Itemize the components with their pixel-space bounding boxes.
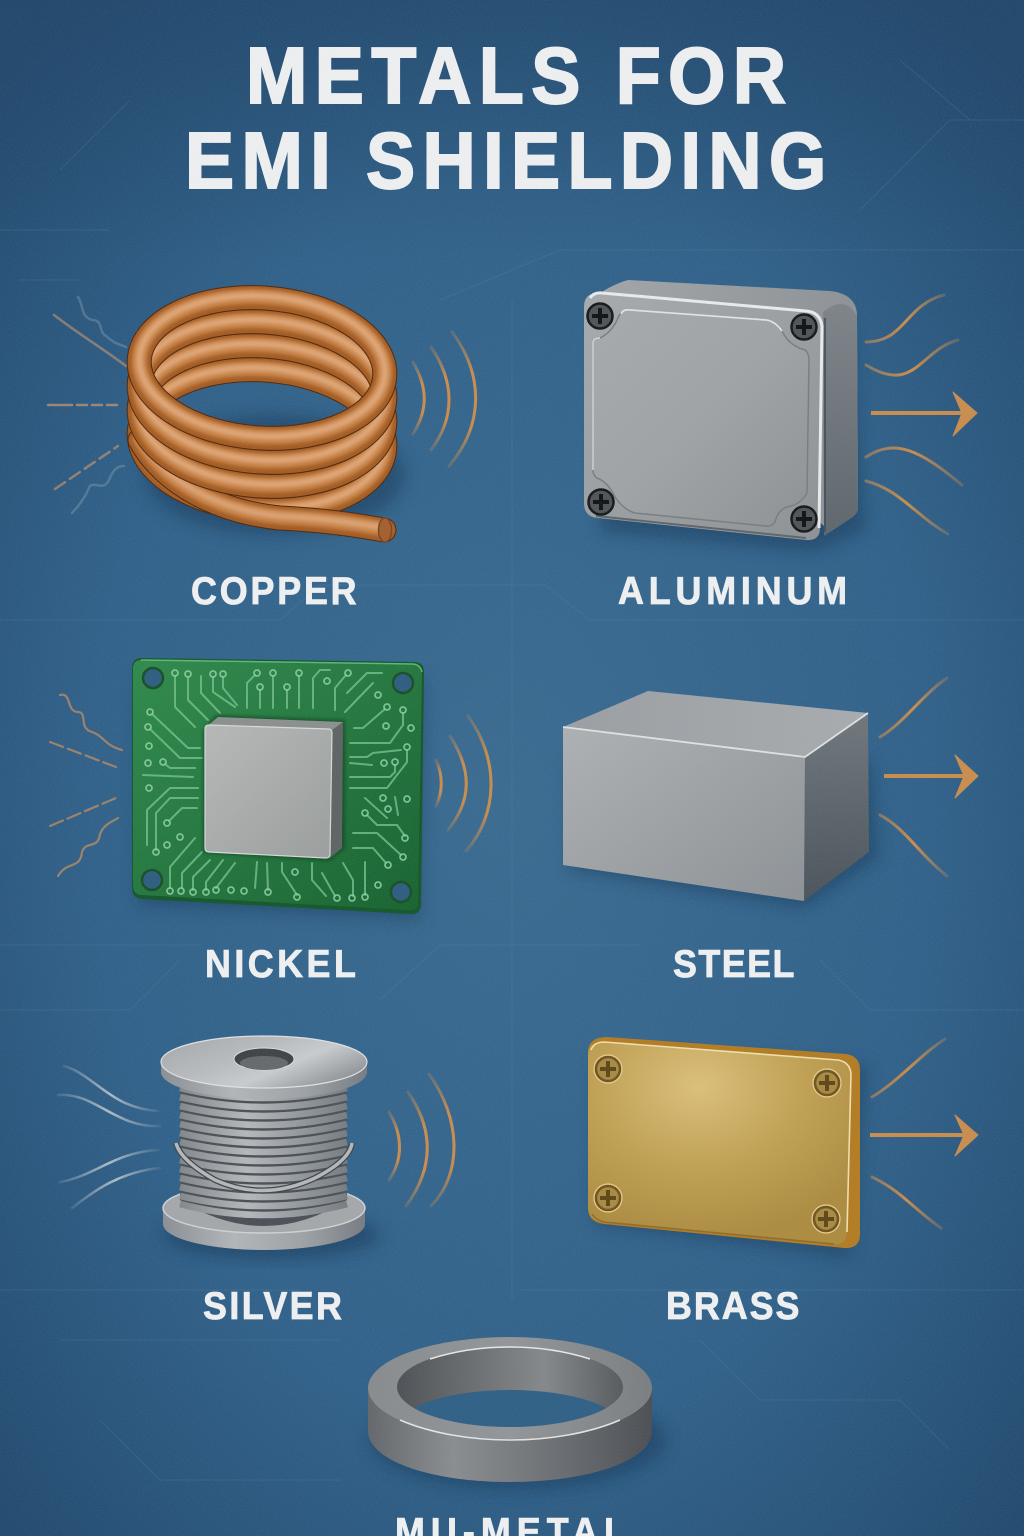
top and side faces	[590, 280, 858, 532]
icon: silver wire spool	[161, 1036, 380, 1259]
tail	[140, 438, 384, 530]
icon: nickel circuit board	[132, 658, 424, 920]
icon: copper coil	[134, 288, 405, 542]
waves: aluminum right	[866, 295, 962, 534]
interference lines: silver left	[58, 1066, 160, 1208]
panel: steel	[563, 678, 978, 985]
traces	[143, 670, 407, 896]
interference lines: copper left	[48, 297, 126, 513]
arrow: steel	[884, 755, 978, 798]
interference lines: nickel left	[50, 695, 122, 876]
top flange	[161, 1062, 367, 1099]
panel: nickel	[50, 658, 491, 985]
screws	[596, 1057, 839, 1231]
panel: brass	[588, 1037, 978, 1327]
panel: copper	[48, 288, 476, 612]
panel: mu-metal	[368, 1337, 666, 1536]
mounting holes	[142, 668, 413, 902]
waves: silver right	[389, 1074, 454, 1206]
panel: silver	[58, 1036, 454, 1327]
icon: brass plate	[588, 1037, 868, 1258]
label: aluminum: ALUMINUM	[618, 569, 847, 612]
recessed panel	[593, 310, 809, 526]
icon: mu-metal ring	[368, 1337, 666, 1490]
title	[185, 31, 826, 206]
waves: copper right	[413, 332, 476, 466]
front face	[584, 293, 823, 540]
waves: brass right	[872, 1039, 945, 1228]
arrow: aluminum	[871, 392, 977, 436]
label: steel: STEEL	[673, 942, 794, 985]
label: brass: BRASS	[666, 1284, 799, 1327]
bottom flange	[163, 1208, 365, 1250]
label: nickel: NICKEL	[205, 942, 356, 985]
label: copper: COPPER	[191, 569, 357, 612]
chip	[203, 715, 345, 861]
waves: nickel right	[436, 716, 491, 851]
icon: steel block	[563, 691, 878, 908]
icon: aluminum enclosure	[584, 280, 865, 552]
title: METALS FOR	[246, 31, 786, 121]
screws	[588, 304, 816, 532]
title: EMI SHIELDING	[185, 116, 826, 206]
wire body	[180, 1085, 347, 1226]
arrow: brass	[870, 1115, 978, 1156]
panel: aluminum	[584, 280, 977, 612]
waves: steel right	[880, 678, 947, 876]
label: silver: SILVER	[203, 1284, 342, 1327]
